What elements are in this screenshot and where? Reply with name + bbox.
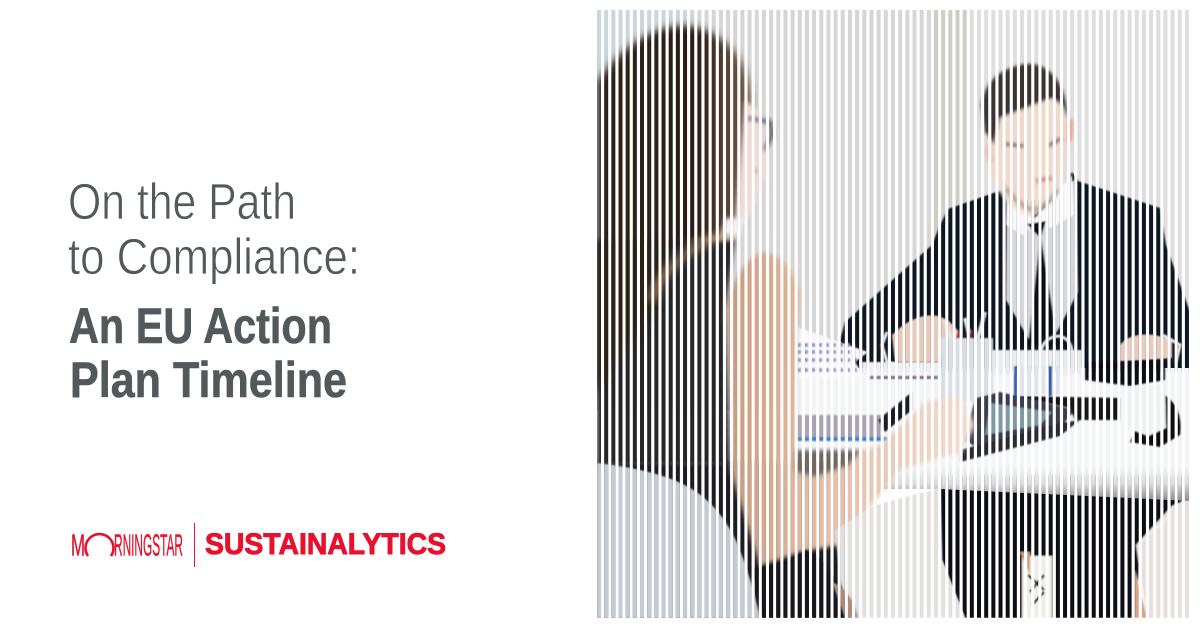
skin near bottom (832, 582, 858, 618)
woman in foreground (597, 26, 975, 618)
binder (1014, 336, 1072, 396)
pens in cup (945, 312, 985, 338)
logo: Morningstar wordmark: M (71, 528, 85, 562)
black device (1085, 360, 1165, 386)
striped photo: meeting at a desk (597, 10, 1190, 618)
subtitle: An EU Action Plan Timeline (69, 298, 347, 408)
white skirt (835, 488, 965, 618)
black top at lower back (752, 550, 845, 618)
long brown hair (597, 26, 752, 395)
head (981, 64, 1073, 217)
hands and cuffs (882, 315, 1180, 367)
face (722, 100, 772, 235)
mug (1124, 385, 1181, 447)
logo: Morningstar wordmark (71, 528, 183, 562)
title: On the Path to Compliance (68, 173, 360, 285)
subtitle: An EU Action Plan Timeline: An EU Action (69, 298, 332, 354)
dress and back (597, 240, 735, 465)
white document (992, 350, 1082, 375)
logo: Sustainalytics wordmark: SUSTAINALYTICS (205, 528, 446, 561)
man in dark suit (840, 64, 1190, 372)
legs under the desk (940, 475, 1190, 618)
logo: Morningstar Sustainalytics: RNINGSTAR (114, 528, 183, 562)
title: On the Path to Compliance: to Compliance: (68, 228, 360, 285)
papers (797, 327, 942, 441)
arm and shoulder (728, 252, 975, 566)
black lower back (597, 462, 850, 618)
desk objects: papers, cup, binder, tablet, mug (797, 312, 1181, 462)
shirt and tie (1006, 175, 1078, 345)
suit (840, 172, 1190, 372)
title: On the Path to Compliance: On the Path (68, 173, 296, 230)
photo background wall (597, 10, 1190, 410)
desk (790, 368, 1190, 501)
logo: Morningstar Sustainalytics (71, 523, 446, 567)
subtitle: An EU Action Plan Timeline: Plan Timeline (70, 352, 347, 408)
tablet (960, 392, 1120, 462)
chair (597, 463, 760, 618)
cup (938, 338, 993, 405)
